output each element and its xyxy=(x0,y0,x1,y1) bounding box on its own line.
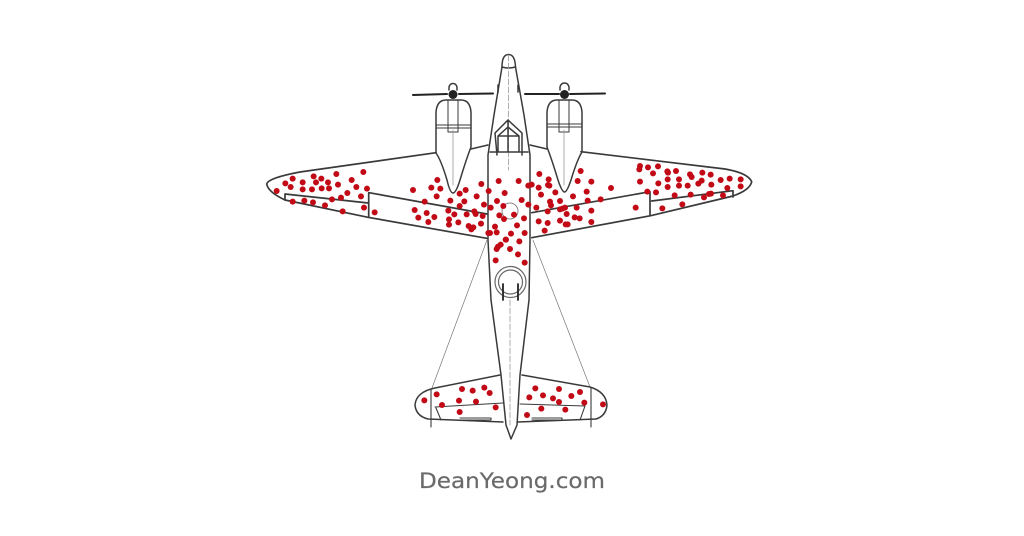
left propeller xyxy=(413,84,493,99)
left wing outline xyxy=(267,153,487,238)
right engine nacelle xyxy=(530,100,582,192)
bullet holes: right wing and rear fuselage xyxy=(503,163,744,266)
left tailplane xyxy=(415,375,503,427)
bracing lines xyxy=(432,240,590,388)
fuselage ring xyxy=(502,203,518,219)
right propeller xyxy=(525,83,605,99)
left engine nacelle xyxy=(436,100,488,193)
aircraft outline xyxy=(267,54,752,439)
bullet holes: tail xyxy=(421,385,606,418)
fuselage xyxy=(488,54,530,439)
bullet holes: left wing and forward fuselage xyxy=(274,169,509,263)
right tailplane xyxy=(518,375,607,427)
cockpit canopy xyxy=(490,120,528,155)
right wing outline xyxy=(532,152,752,238)
website credit: DeanYeong.com xyxy=(419,469,605,493)
dorsal turret xyxy=(495,266,526,300)
